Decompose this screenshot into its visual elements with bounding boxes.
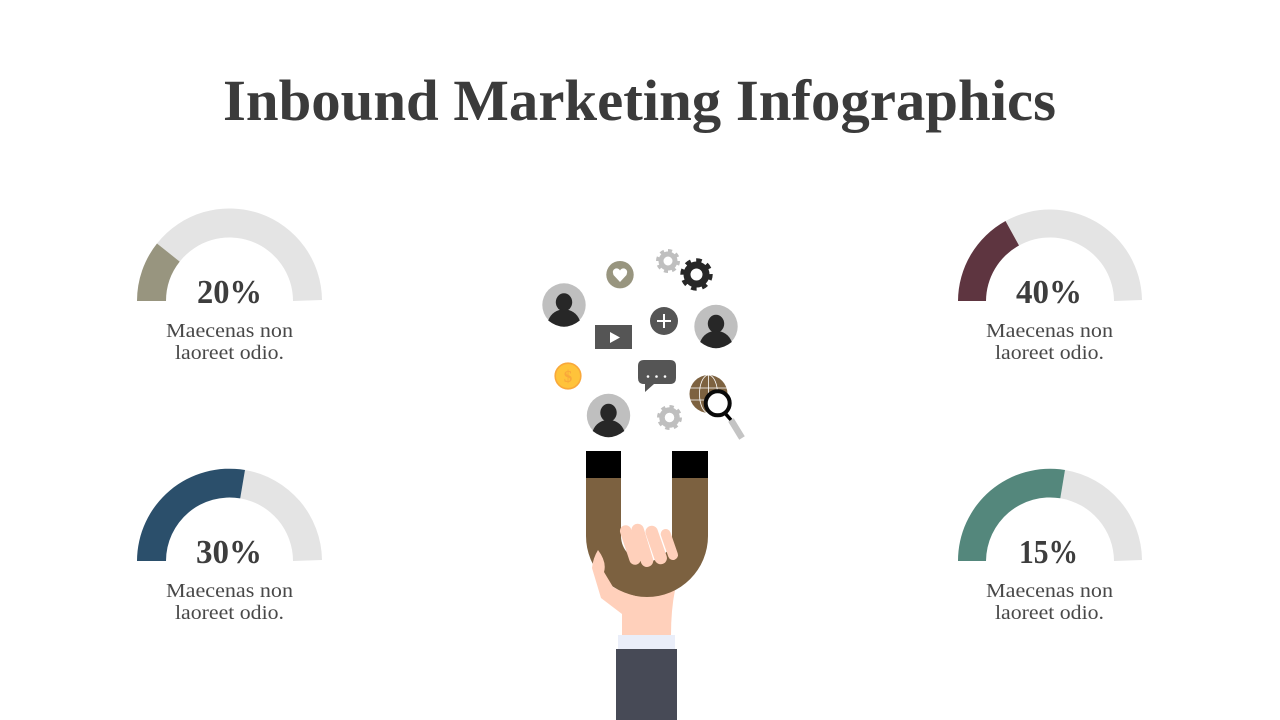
icon: speech bubble [638,360,676,392]
panel: gauge 40%: laoreet odio. [995,342,1104,364]
panel: gauge 40%: Maecenas non [986,320,1113,342]
panel: gauge 40% [958,210,1142,364]
icon: person right [694,305,738,348]
panel: gauge 15% [958,469,1142,624]
icon: person left [542,283,586,327]
magnet body [586,478,708,597]
title: Inbound Marketing Infographics [223,68,1056,133]
fingers [626,530,673,561]
icon: light gear bottom [658,406,680,428]
illustration: hand holding magnet [586,451,708,720]
palm [610,590,675,635]
panel: gauge 30%: 30% [196,534,262,571]
panel: gauge 15%: laoreet odio. [995,602,1104,624]
icon: coin: $ [564,367,573,386]
panel: gauge 20%: Maecenas non [166,320,293,342]
magnet right pole [672,451,708,478]
icon: video player [595,325,632,349]
panel: gauge 30%: Maecenas non [166,580,293,602]
icon: light gear top [658,250,678,272]
thumb side of hand [592,550,640,614]
icon: dark gear [682,260,711,289]
panel: gauge 15%: Maecenas non [986,580,1113,602]
icon: person bottom [587,394,630,437]
shirt cuff [618,635,675,649]
panel: gauge 30% [137,469,322,624]
icon: coin [555,363,581,389]
panel: gauge 15%: 15% [1019,534,1078,571]
icon: plus badge [650,307,678,335]
magnet left pole [586,451,621,478]
sleeve [616,649,677,720]
panel: gauge 20%: 20% [197,274,262,311]
panel: gauge 20% [137,208,322,364]
panel: gauge 40%: 40% [1016,274,1082,311]
icon: heart badge [606,261,634,288]
panel: gauge 30%: laoreet odio. [175,602,284,624]
panel: gauge 20%: laoreet odio. [175,342,284,364]
icon: globe with magnifier [690,375,742,438]
